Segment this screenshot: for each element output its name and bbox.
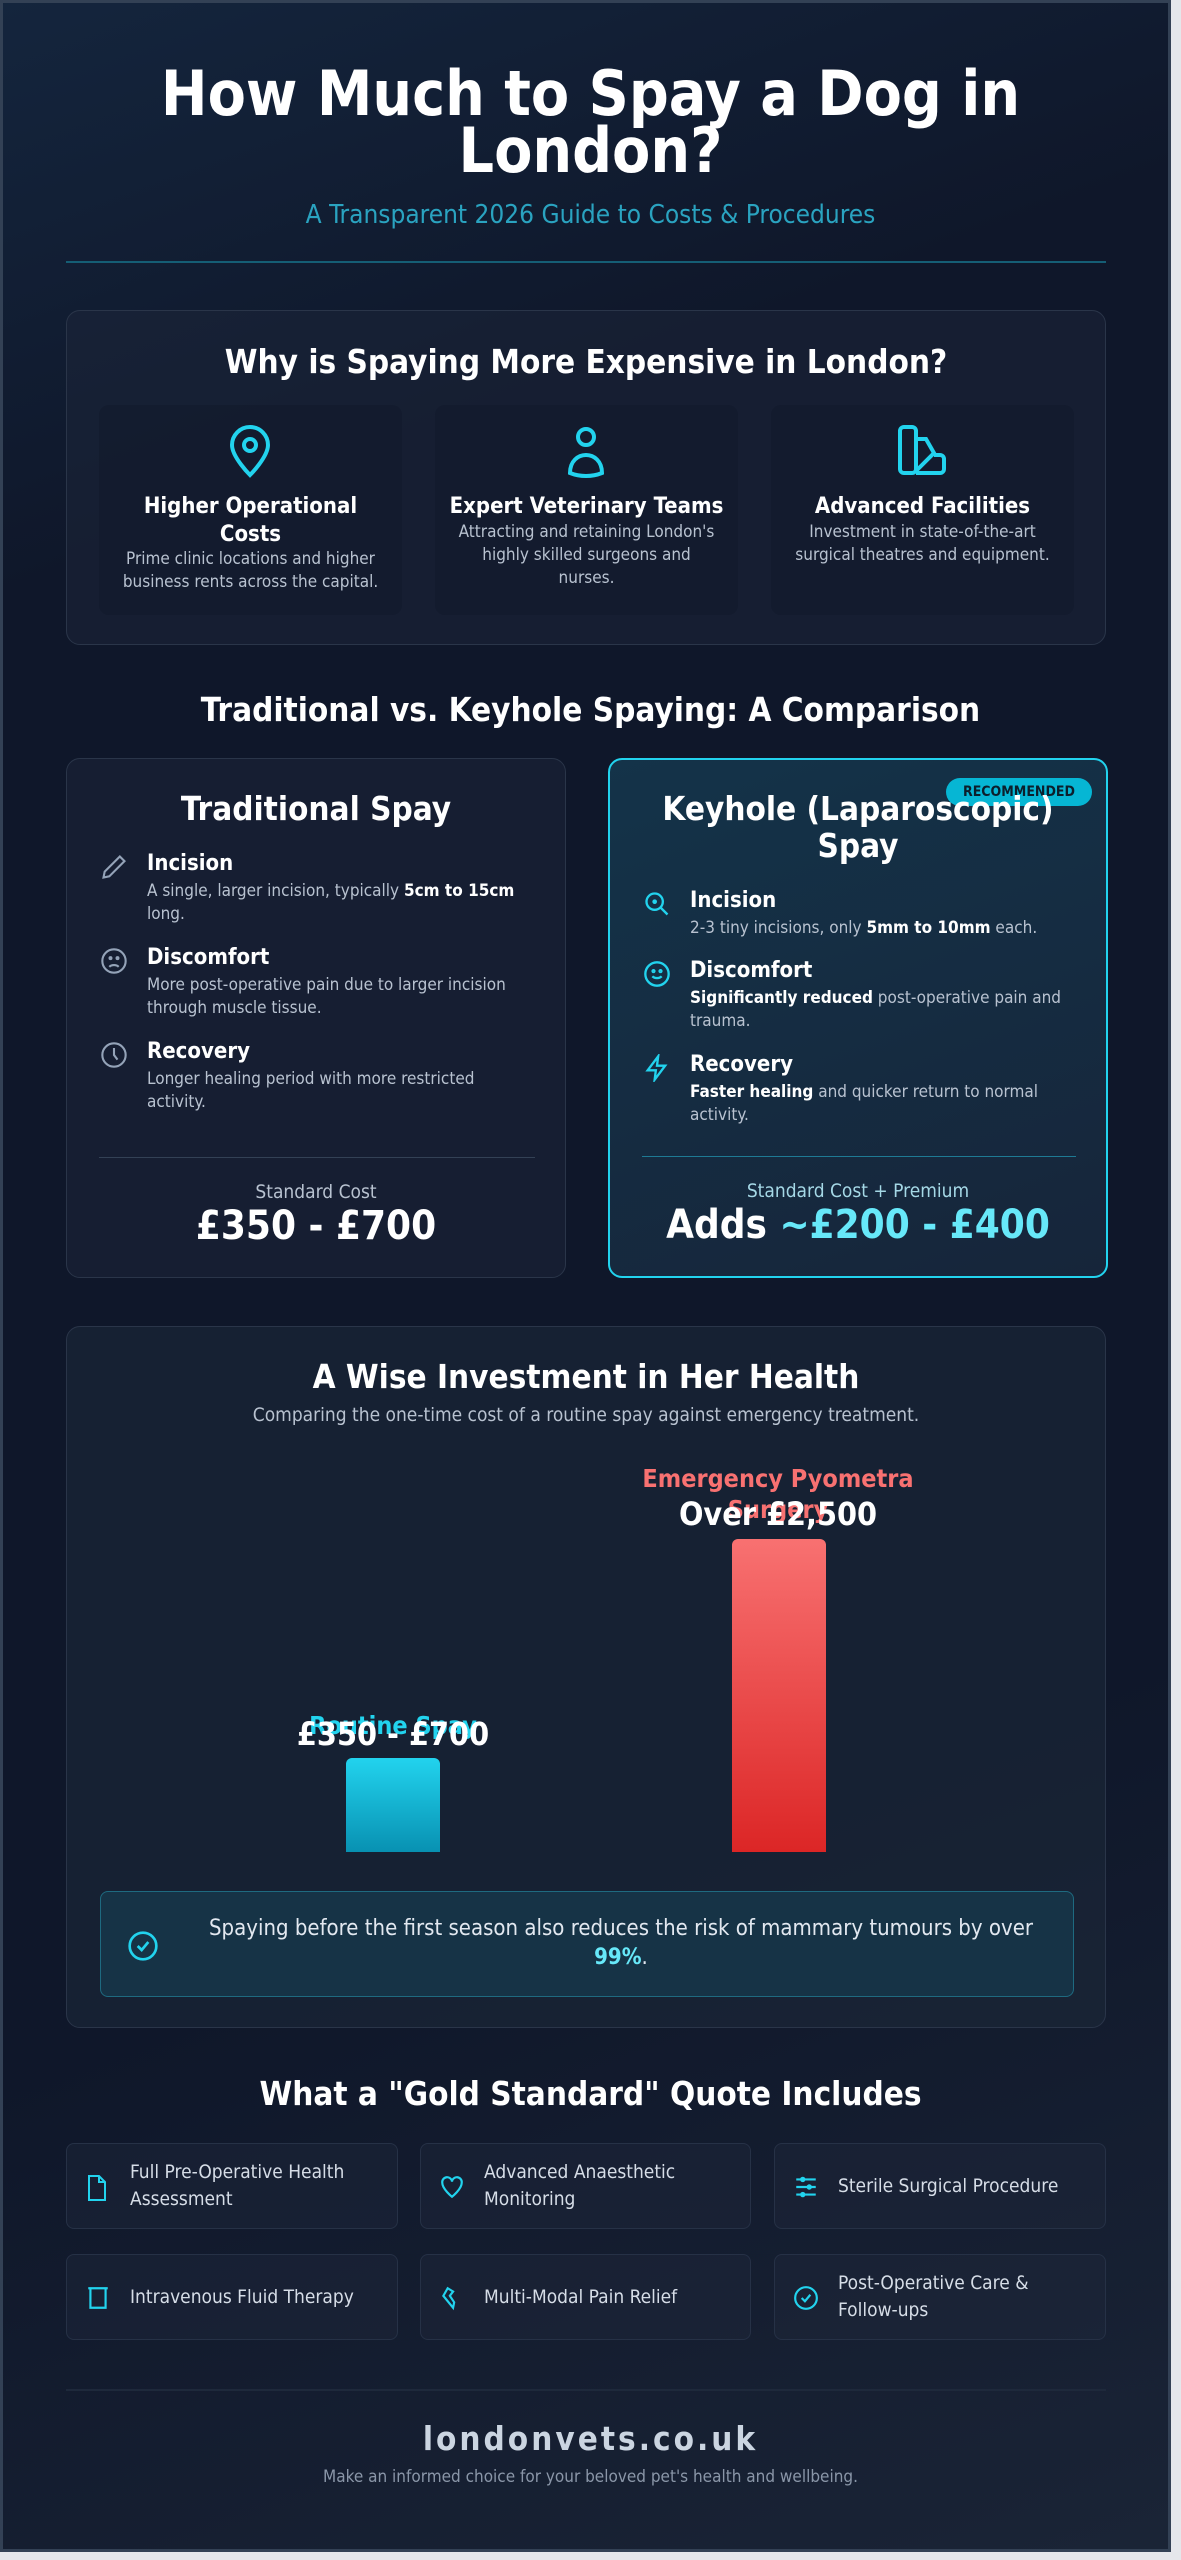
price: traditional [196,1181,436,1249]
icon: facilities [898,425,946,475]
bar: emergency surgery [642,1464,914,1852]
card: expert teams: Attracting and retaining London's highly skilled surgeons and nurses. [459,522,714,588]
heading: gold standard: What a "Gold Standard" Quote Includes [259,2074,922,2113]
item: fluid therapy [66,2254,398,2340]
card: operational costs: Prime clinic locations and higher business rents across the capital. [123,549,378,592]
item: incision [645,888,1037,938]
card: facilities: Investment in state-of-the-art surgical theatres and equipment. [795,522,1050,565]
title: London? [459,114,722,187]
panel: keyhole spay: Recovery [690,1052,793,1077]
subtitle: investment: Comparing the one-time cost of a routine spay against emergency treatment. [253,1404,919,1426]
item: recovery [101,1039,474,1112]
item: pain relief [420,2254,751,2340]
item: post-op care: Follow-ups [838,2299,928,2321]
card: operational costs: Higher Operational Costs [144,494,357,547]
footer: brand: londonvets.co.uk [423,2419,758,2458]
card: expert teams: Expert Veterinary Teams [450,494,723,519]
heading: keyhole: Spay [817,826,898,865]
panel: traditional spay: A single, larger incision, typically 5cm to 15cm long. [147,881,514,924]
item: post-op care: Post-Operative Care & [838,2272,1029,2294]
subtitle: A Transparent 2026 Guide to Costs & Procedures [306,200,875,230]
item: sterile procedure [774,2143,1106,2229]
item: anaesthetic monitoring: Monitoring [484,2188,575,2210]
item: discomfort [101,945,506,1018]
item: anaesthetic monitoring [420,2143,751,2229]
item: incision [102,851,514,924]
panel: traditional spay [66,758,566,1278]
bar: emergency surgery: Surgery [728,1495,828,1524]
panel: why expensive [66,310,1106,645]
footer: tagline: Make an informed choice for your beloved pet's health and wellbeing. [323,2467,858,2487]
price: keyhole [666,1180,1050,1248]
item: post-op care [774,2254,1106,2340]
title: How Much to Spay a Dog in [161,57,1020,130]
heading: keyhole: Keyhole (Laparoscopic) [662,789,1054,828]
item: recovery [645,1052,1038,1125]
icon: map pin [230,425,270,478]
heading: investment: A Wise Investment in Her Health [313,1357,859,1396]
heading: comparison: Traditional vs. Keyhole Spaying: A Comparison [201,690,980,729]
panel: traditional spay: Incision [147,851,233,876]
panel: keyhole spay [608,758,1108,1278]
panel: traditional spay: Recovery [147,1039,250,1064]
panel: keyhole spay: Incision [690,888,776,913]
panel: traditional spay: Discomfort [147,945,269,970]
panel: keyhole spay: Discomfort [690,958,812,983]
badge: recommended [946,778,1092,806]
panel: keyhole spay: 2-3 tiny incisions, only 5mm to 10mm each. [690,918,1037,938]
heading: keyhole [662,789,1054,865]
callout: mammary tumours: Spaying before the first season also reduces the risk of mammary tumours by over 99%. [209,1916,1033,1970]
bar chart [297,1464,914,1852]
item: discomfort [644,958,1061,1031]
price: traditional: £350 - £700 [196,1203,436,1249]
price: keyhole: Adds ~£200 - £400 [666,1202,1050,1248]
item: fluid therapy: Intravenous Fluid Therapy [130,2286,354,2308]
card: expert teams [435,405,738,615]
title [161,57,1020,187]
item: sterile procedure: Sterile Surgical Procedure [838,2174,1058,2196]
item: health assessment: Assessment [130,2188,233,2210]
card: facilities [771,405,1074,615]
panel: keyhole spay: Faster healing and quicker return to normal activity. [690,1082,1038,1125]
price: keyhole: Standard Cost + Premium [747,1180,969,1202]
card: operational costs [99,405,402,615]
heading: traditional: Traditional Spay [181,789,451,828]
heading: why expensive: Why is Spaying More Expensive in London? [225,342,947,381]
icon: person [568,427,604,478]
bar: routine spay: Routine Spay [309,1711,477,1740]
price: traditional: Standard Cost [255,1181,377,1203]
bar: emergency surgery: Emergency Pyometra [642,1464,914,1493]
badge: recommended: RECOMMENDED [963,784,1075,800]
item: anaesthetic monitoring: Advanced Anaesthetic [484,2161,675,2183]
callout: mammary tumours [100,1891,1074,1997]
item: health assessment: Full Pre-Operative Health [130,2161,344,2183]
bar: emergency surgery: Over £2,500 [679,1495,877,1533]
item: health assessment [66,2143,398,2229]
panel: traditional spay: More post-operative pain due to larger incision through muscle tissue. [147,975,506,1018]
item: pain relief: Multi-Modal Pain Relief [484,2286,677,2308]
bar: routine spay [297,1711,489,1852]
grid: quote inclusions [66,2143,1106,2340]
icon: check circle [128,1931,158,1961]
panel: keyhole spay: Significantly reduced post-operative pain and trauma. [690,988,1061,1031]
panel: investment chart [66,1326,1106,2028]
panel: traditional spay: Longer healing period with more restricted activity. [147,1069,474,1112]
card: facilities: Advanced Facilities [815,494,1030,519]
bar: routine spay: £350 - £700 [297,1715,489,1753]
